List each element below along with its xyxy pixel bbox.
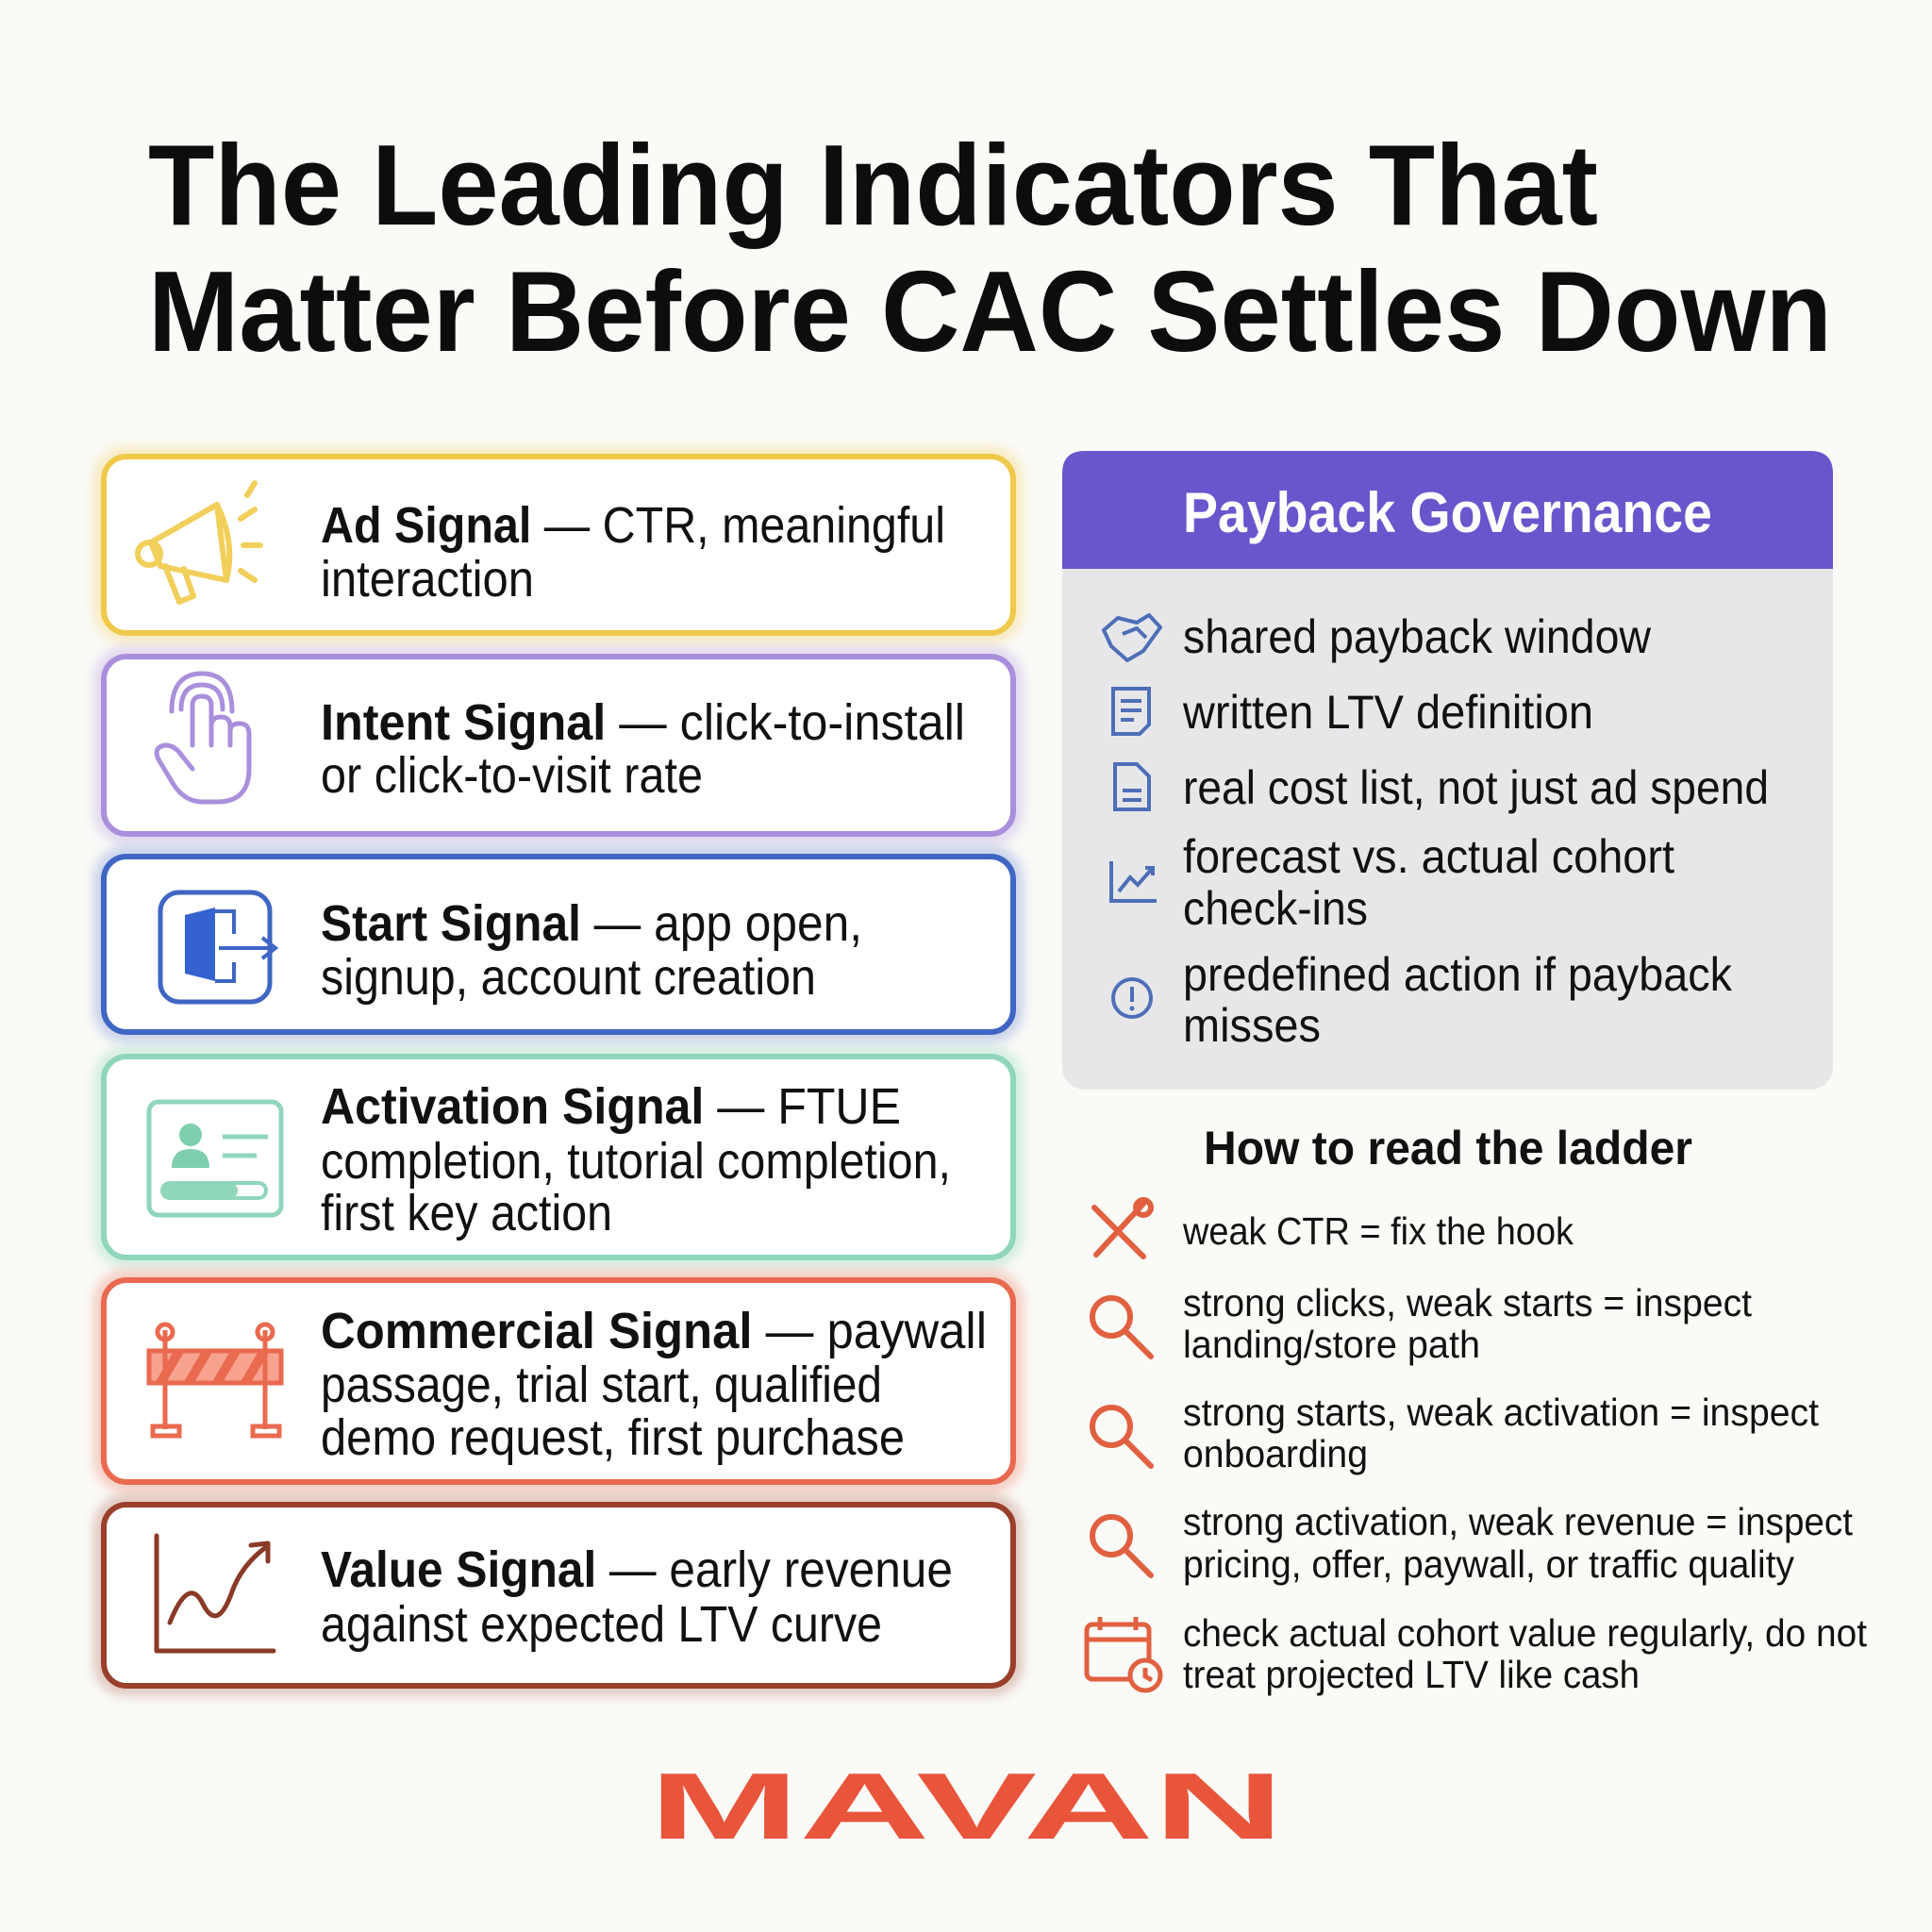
list: ladder reading xyxy=(1087,1200,1868,1696)
text: ladder 2: strong clicks, weak starts = inspect xyxy=(1183,1281,1753,1324)
heading: payback governance: Payback Governance xyxy=(1183,481,1712,544)
panel: commercial signal xyxy=(101,1277,1016,1485)
text: ladder 4: pricing, offer, paywall, or traffic quality xyxy=(1183,1542,1794,1586)
panel: activation signal xyxy=(101,1054,1016,1260)
text: ladder 1: weak CTR = fix the hook xyxy=(1182,1209,1574,1253)
text: intent signal: Intent Signal — click-to-install xyxy=(321,694,965,751)
icon: megaphone xyxy=(138,483,260,602)
text: item 4: forecast vs. actual cohort xyxy=(1183,830,1674,883)
text: value signal: Value Signal — early revenue xyxy=(321,1541,953,1598)
icon: tap hand xyxy=(157,674,249,802)
icon: magnifier 1 xyxy=(1092,1298,1151,1357)
title: Matter Before CAC Settles Down xyxy=(148,247,1832,375)
text: ad signal: Ad Signal — CTR, meaningful xyxy=(321,497,945,554)
panel: commercial signal: demo request, first purchase xyxy=(321,1409,905,1466)
text: ladder 5: treat projected LTV like cash xyxy=(1183,1653,1640,1696)
panel: ad signal xyxy=(101,454,1016,636)
text: commercial signal: Commercial Signal — paywall xyxy=(321,1303,987,1359)
icon: profile card xyxy=(149,1102,281,1215)
text: ladder 3 xyxy=(1183,1391,1820,1475)
icon: tools xyxy=(1094,1200,1151,1257)
text: ladder 5: check actual cohort value regularly, do not xyxy=(1183,1611,1868,1655)
panel: intent signal: or click-to-visit rate xyxy=(321,747,703,804)
panel: commercial signal: passage, trial start, qualified xyxy=(321,1357,882,1413)
panel: activation signal: first key action xyxy=(321,1185,612,1241)
text: activation signal: Activation Signal — FTUE xyxy=(321,1078,901,1135)
text: start signal: Start Signal — app open, xyxy=(321,895,862,952)
text: ladder 4 xyxy=(1183,1500,1854,1586)
text: item 1: shared payback window xyxy=(1183,610,1652,663)
title: The Leading Indicators That xyxy=(148,121,1598,249)
icon: barrier xyxy=(149,1324,281,1436)
icon: calendar clock xyxy=(1087,1617,1160,1690)
text: item 5: predefined action if payback xyxy=(1183,948,1733,1001)
heading: how to read the ladder: How to read the ladder xyxy=(1204,1122,1692,1174)
icon: handshake xyxy=(1104,615,1160,660)
panel: payback governance: check-ins xyxy=(1183,882,1368,935)
panel: ad signal: interaction xyxy=(321,551,534,608)
panel: activation signal: completion, tutorial completion, xyxy=(321,1133,951,1190)
panel: value signal xyxy=(101,1502,1016,1689)
text: item 3: real cost list, not just ad spend xyxy=(1183,761,1769,814)
icon: magnifier 3 xyxy=(1092,1517,1151,1575)
text: ladder 2 xyxy=(1183,1281,1753,1366)
title xyxy=(148,121,1832,375)
panel: value signal: against expected LTV curve xyxy=(321,1596,882,1653)
text: item 2: written LTV definition xyxy=(1182,686,1593,739)
text: ladder 4: strong activation, weak revenue = inspect xyxy=(1183,1500,1854,1543)
text: ladder 5 xyxy=(1183,1611,1868,1696)
panel: payback governance: misses xyxy=(1183,999,1321,1052)
text: ladder 3: onboarding xyxy=(1183,1432,1368,1475)
text: ladder 3: strong starts, weak activation = inspect xyxy=(1183,1391,1820,1434)
icon: trend line xyxy=(1111,861,1157,901)
panel: payback governance xyxy=(1062,451,1833,1090)
icon: file xyxy=(1115,764,1149,809)
icon: door exit xyxy=(160,892,275,1002)
icon: document lines xyxy=(1113,689,1149,734)
panel: intent signal xyxy=(101,654,1016,837)
panel: start signal: signup, account creation xyxy=(321,949,816,1006)
logo: MAVAN: MAVAN xyxy=(649,1754,1284,1859)
icon: alert xyxy=(1113,979,1151,1017)
icon: growth chart xyxy=(157,1536,274,1651)
icon: magnifier 2 xyxy=(1092,1407,1151,1466)
panel: start signal xyxy=(101,854,1016,1035)
text: ladder 2: landing/store path xyxy=(1183,1323,1480,1366)
